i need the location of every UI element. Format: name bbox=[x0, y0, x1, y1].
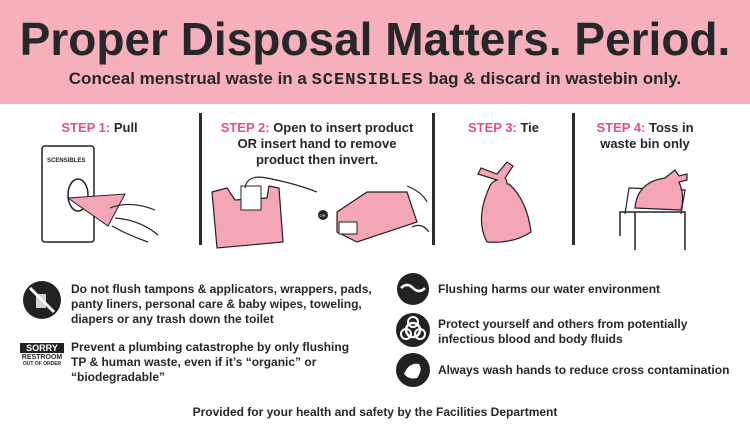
illustration: dispenser bbox=[41, 145, 158, 243]
step 3 label: STEP 3: Tie bbox=[468, 120, 539, 135]
footer: Provided for your health and safety by the Facilities Department bbox=[193, 405, 557, 419]
header banner bbox=[0, 0, 750, 104]
step 2 label: STEP 2: Open to insert product bbox=[221, 120, 413, 135]
icon: no flush bbox=[23, 281, 61, 319]
icon: biohazard bbox=[396, 313, 430, 347]
icon: water bbox=[397, 273, 429, 305]
illustration: tied bag bbox=[477, 161, 532, 243]
illustration: bag with product / or / inverted bag bbox=[211, 176, 429, 249]
step 4 label bbox=[596, 120, 694, 151]
icon: sorry sign: OUT OF ORDER bbox=[23, 361, 61, 367]
title: Proper Disposal Matters. Period. bbox=[20, 13, 730, 65]
icon: sorry sign bbox=[20, 343, 64, 367]
step 1 label: STEP 1: Pull bbox=[61, 120, 138, 135]
text: Always wash hands to reduce cross contamination bbox=[438, 363, 729, 377]
item: no flush bbox=[23, 281, 372, 326]
text: Flushing harms our water environment bbox=[438, 282, 660, 296]
step 4 label: waste bin only bbox=[600, 136, 690, 151]
illustration: bag with product / or / inverted bag: OR bbox=[320, 213, 326, 218]
step 2 label: product then invert. bbox=[256, 152, 378, 167]
illustration: bag into bin bbox=[619, 169, 688, 250]
step 4 bbox=[596, 120, 694, 250]
illustration: dispenser: SCENSIBLES bbox=[47, 158, 85, 164]
step 3 bbox=[468, 120, 539, 243]
icon: sorry sign: SORRY bbox=[26, 343, 58, 353]
item: plumbing bbox=[20, 340, 349, 384]
step 2 bbox=[211, 120, 429, 249]
text: Prevent a plumbing catastrophe by only flushing TP & human waste, even if it’s “organic” or “biodegradable” bbox=[71, 340, 349, 384]
text: Protect yourself and others from potentially infectious blood and body fluids bbox=[438, 317, 687, 346]
item: biohazard bbox=[396, 313, 688, 347]
step 2 label bbox=[221, 120, 414, 167]
step 4 label: STEP 4: Toss in bbox=[596, 120, 694, 135]
item: water bbox=[397, 273, 660, 305]
icon: hands bbox=[396, 353, 430, 387]
item: wash hands bbox=[396, 353, 729, 387]
text: Do not flush tampons & applicators, wrappers, pads, panty liners, personal care & baby wipes, toweling, diapers or any trash down the toilet bbox=[71, 282, 372, 326]
step 2 label: OR insert hand to remove bbox=[238, 136, 396, 151]
step 1 bbox=[41, 120, 158, 243]
subtitle: Conceal menstrual waste in a SCENSIBLES bag & discard in wastebin only. bbox=[69, 69, 681, 90]
icon: sorry sign: RESTROOM bbox=[22, 354, 62, 361]
